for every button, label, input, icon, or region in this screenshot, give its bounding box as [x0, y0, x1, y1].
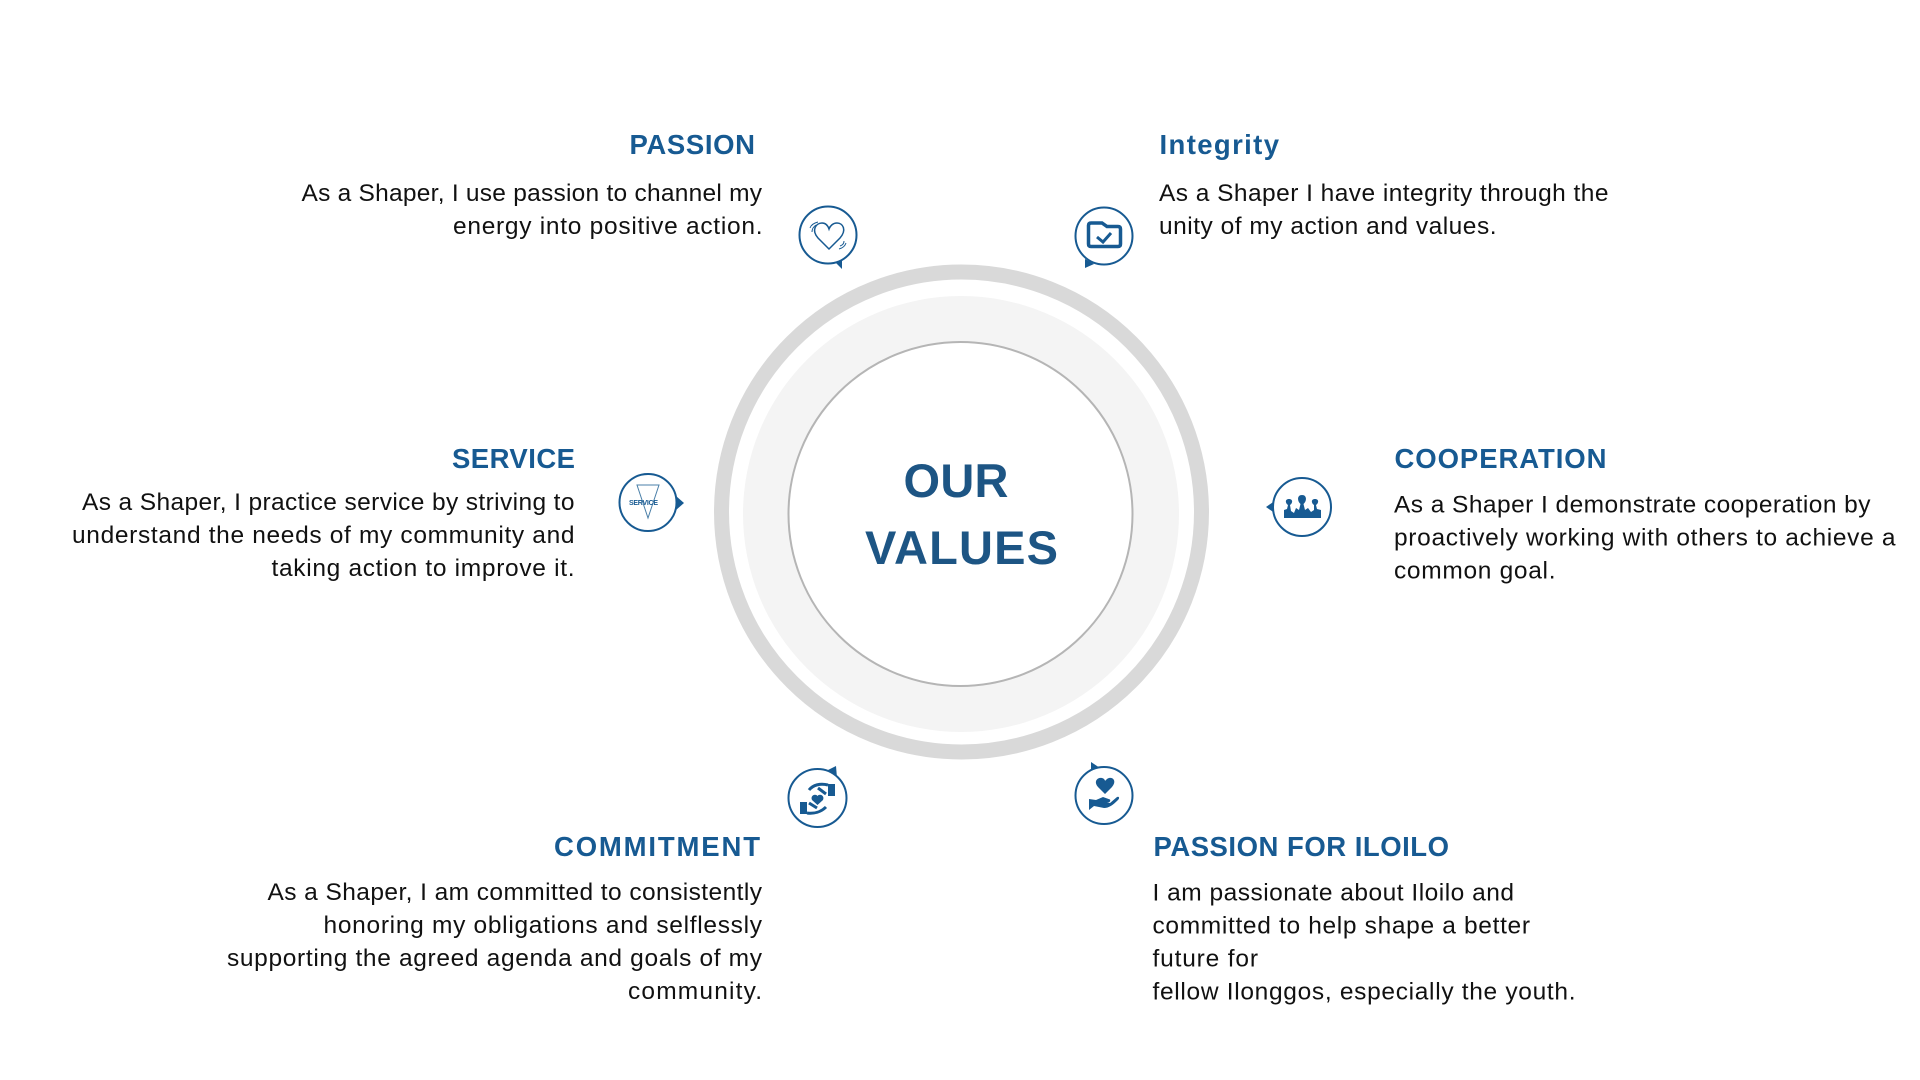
icon: heart	[800, 206, 856, 269]
panel: integrity	[1159, 129, 1608, 240]
panel: passion for iloilo: future for	[1152, 946, 1258, 973]
icon: folder with check	[1076, 208, 1132, 268]
panel: cooperation: proactively working with others to achieve a	[1394, 525, 1896, 552]
panel: passion for iloilo: I am passionate about Iloilo and	[1152, 880, 1514, 907]
panel: passion for iloilo: committed to help shape a better	[1152, 913, 1530, 940]
panel: passion for iloilo	[1152, 831, 1576, 1006]
icon: service triangle: SERVICE	[629, 500, 658, 507]
panel: commitment: community.	[628, 978, 762, 1005]
panel: passion	[302, 129, 763, 240]
panel: passion for iloilo: PASSION FOR ILOILO	[1154, 831, 1449, 862]
title: OUR	[904, 454, 1008, 507]
icon: group of people	[1266, 478, 1331, 536]
panel: service: understand the needs of my community and	[72, 522, 574, 549]
icon: hand holding heart	[1076, 762, 1132, 824]
panel: service: SERVICE	[452, 443, 575, 474]
panel: cooperation	[1394, 443, 1896, 585]
panel: service	[72, 443, 575, 582]
panel: integrity: Integrity	[1160, 129, 1280, 160]
panel: commitment: As a Shaper, I am committed to consistently	[268, 879, 763, 906]
panel: passion: energy into positive action.	[453, 213, 762, 240]
panel: commitment: supporting the agreed agenda and goals of my	[227, 945, 763, 972]
panel: passion for iloilo: fellow Ilonggos, especially the youth.	[1152, 979, 1576, 1006]
panel: integrity: unity of my action and values.	[1159, 213, 1496, 240]
panel: commitment: COMMITMENT	[554, 831, 760, 862]
panel: passion: As a Shaper, I use passion to channel my	[302, 180, 763, 207]
panel: service: As a Shaper, I practice service by striving to	[82, 489, 574, 516]
title: VALUES	[865, 521, 1058, 574]
panel: commitment	[227, 831, 763, 1005]
panel: cooperation: common goal.	[1394, 558, 1556, 585]
icon: hands exchanging heart	[788, 766, 846, 827]
panel: service: taking action to improve it.	[272, 555, 574, 582]
panel: cooperation: COOPERATION	[1394, 443, 1606, 474]
title	[865, 454, 1058, 574]
panel: commitment: honoring my obligations and selflessly	[324, 912, 763, 939]
icon: service triangle	[620, 474, 684, 531]
central ring diagram	[722, 272, 1202, 752]
panel: passion: PASSION	[630, 129, 755, 160]
panel: cooperation: As a Shaper I demonstrate cooperation by	[1394, 492, 1871, 519]
panel: integrity: As a Shaper I have integrity through the	[1159, 180, 1608, 207]
